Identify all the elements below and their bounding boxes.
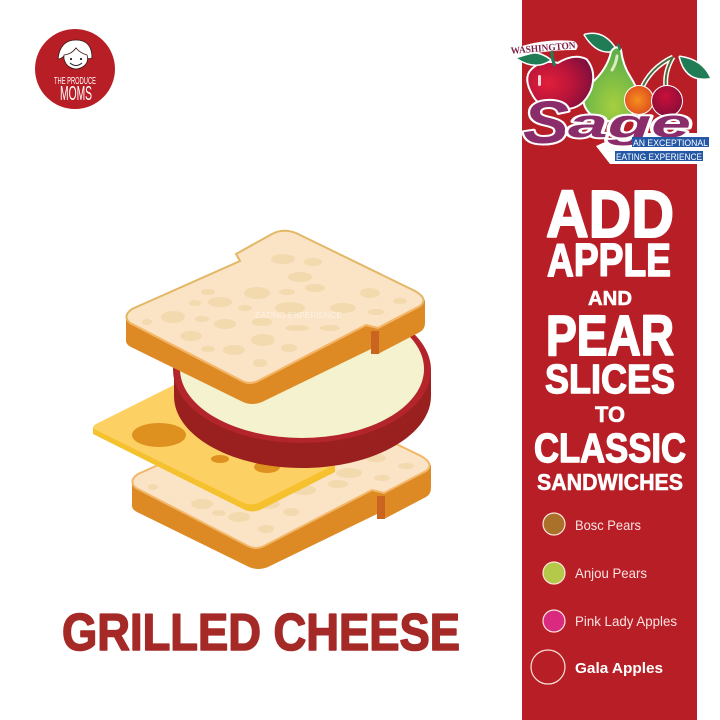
cherries [625, 86, 682, 116]
top bread slice [126, 231, 425, 404]
legend item: Pink Lady Apples [543, 610, 677, 632]
title: Grilled Cheese: GRILLED CHEESE [62, 604, 460, 662]
cheese slice [93, 372, 340, 512]
hair and face [58, 40, 92, 69]
sidebar heading: TO [595, 402, 625, 427]
legend item: Anjou Pears [543, 562, 647, 584]
legend item: Gala Apples [531, 650, 663, 684]
sidebar heading: APPLE [547, 234, 671, 286]
Washington label: WASHINGTON [510, 40, 577, 57]
apple slice [173, 297, 431, 468]
logo: The Produce Moms: MOMS [60, 83, 92, 105]
panel: red sidebar [522, 0, 697, 720]
tagline banner: EATING EXPERIENCE [616, 152, 702, 162]
illustration: grilled cheese sandwich [93, 231, 431, 569]
brand wordmark: age [568, 102, 691, 146]
tagline banner [615, 137, 709, 162]
logo: Washington Sage [510, 34, 712, 164]
brand wordmark: S [523, 89, 569, 156]
cherry stems and leaf [641, 57, 710, 90]
legend [531, 513, 677, 684]
sidebar heading: PEAR [546, 304, 674, 368]
legend item: Gala Apples: Gala Apples [575, 660, 663, 677]
sidebar heading: AND [588, 288, 632, 310]
tagline banner: AN EXCEPTIONAL [633, 138, 708, 148]
sidebar heading: CLASSIC [534, 425, 686, 471]
legend item: Bosc Pears: Bosc Pears [575, 517, 641, 533]
brand wordmark [523, 89, 691, 156]
faint overprinted text on bread: EATING EXPERIENCE [255, 311, 342, 320]
bottom bread slice [132, 396, 431, 569]
legend item: Pink Lady Apples: Pink Lady Apples [575, 613, 677, 629]
legend item: Anjou Pears: Anjou Pears [575, 565, 647, 581]
legend item: Bosc Pears [543, 513, 641, 535]
sidebar heading: SLICES [545, 356, 675, 402]
sidebar heading: ADD [546, 177, 674, 252]
tagline backing [596, 133, 712, 164]
logo: The Produce Moms: THE PRODUCE [54, 75, 96, 87]
logo: The Produce Moms [35, 29, 115, 109]
sidebar heading: SANDWICHES [537, 469, 683, 495]
apple [517, 50, 592, 108]
pear [584, 34, 638, 120]
sidebar heading [534, 177, 686, 495]
